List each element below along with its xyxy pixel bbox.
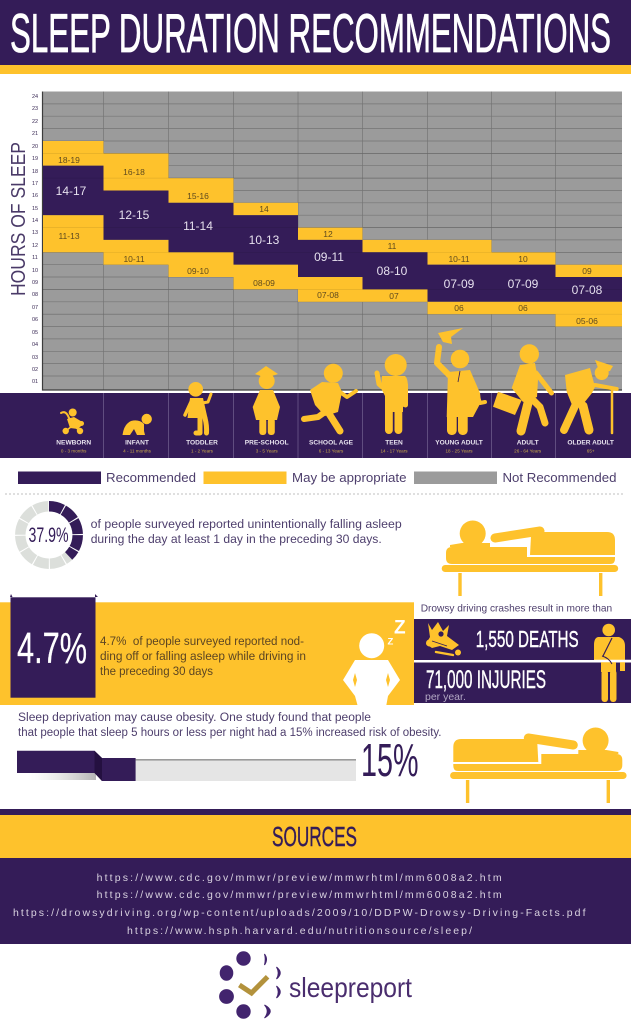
- panel: deaths and injuries: [414, 619, 631, 703]
- age group band: 14 - 17 Years: [380, 448, 408, 454]
- text: driving stat: [100, 634, 306, 678]
- sources list: https://www.hsph.harvard.edu/nutritionsource/sleep/: [127, 925, 472, 937]
- panel: deaths and injuries: per year.: [425, 691, 466, 703]
- column: toddler: [168, 178, 234, 277]
- sources list: https://www.cdc.gov/mmwr/preview/mmwrhtml/mm6008a2.htm: [97, 872, 502, 884]
- age group band: 18 - 25 Years: [445, 448, 473, 454]
- logo: sleepreport: sleepreport: [289, 972, 412, 1003]
- column: pre-school: 14: [259, 204, 269, 214]
- legend: Not Recommended: [502, 471, 617, 485]
- y axis ticks: 08: [32, 292, 38, 298]
- age group band: YOUNG ADULT: [435, 440, 483, 446]
- sources heading: SOURCES: [272, 821, 357, 852]
- column: young adult: 06: [454, 303, 464, 313]
- text: driving stat: ding off or falling asleep while driving in: [100, 649, 306, 663]
- y axis ticks: 17: [32, 181, 38, 187]
- column: teen: 08-10: [377, 264, 408, 278]
- column: young adult: [428, 240, 492, 314]
- age group band: 6 - 13 Years: [319, 448, 344, 454]
- column: newborn: 18-19: [58, 155, 80, 165]
- column: school age: [298, 228, 362, 302]
- age group band: [0, 393, 631, 458]
- icon: teen: [377, 354, 408, 434]
- icon: drowsy person: Z: [394, 618, 406, 638]
- big number: 15%: 15%: [361, 734, 418, 786]
- icon: car crash: [426, 622, 461, 656]
- age group band: 0 - 3 months: [61, 448, 87, 454]
- legend: May be appropriate: [292, 471, 407, 485]
- y axis ticks: 24: [32, 94, 38, 100]
- age group band: 65+: [587, 448, 595, 454]
- column: pre-school: [234, 203, 298, 289]
- column: adult: [492, 252, 556, 314]
- age group band: TODDLER: [186, 440, 218, 446]
- y axis ticks: 11: [32, 255, 38, 261]
- logo: sleepreport: [219, 951, 412, 1019]
- icon: toddler: [185, 382, 211, 433]
- age group band: NEWBORN: [56, 440, 91, 446]
- y axis ticks: 04: [32, 342, 38, 348]
- column: teen: [362, 240, 428, 302]
- age group band: 3 - 5 Years: [256, 448, 278, 454]
- column: newborn: [43, 141, 104, 252]
- text: daytime sleep stat: of people surveyed reported unintentionally falling asleep: [91, 517, 402, 531]
- icon: running child: [304, 364, 356, 431]
- legend: Recommended: [106, 471, 196, 485]
- panel: drowsy driving 4.7%: [0, 594, 414, 707]
- y axis ticks: 03: [32, 355, 38, 361]
- y axis ticks: 10: [32, 268, 38, 274]
- column: pre-school: 08-09: [253, 278, 275, 288]
- icon: person in bed: [442, 520, 618, 596]
- column: toddler: 15-16: [187, 191, 209, 201]
- text: driving stat: the preceding 30 days: [100, 664, 213, 678]
- progress bar: 15%: [17, 751, 356, 781]
- y axis ticks: 09: [32, 280, 38, 286]
- text: drowsy driving intro: Drowsy driving crashes result in more than: [421, 602, 612, 614]
- icon: drowsy person: Z: [388, 636, 394, 648]
- age group band: ADULT: [517, 440, 539, 446]
- column: newborn: 11-13: [58, 231, 80, 241]
- y axis ticks: 22: [32, 119, 38, 125]
- y axis ticks: 06: [32, 317, 38, 323]
- sources list: https://drowsydriving.org/wp-content/uploads/2009/10/DDPW-Drowsy-Driving-Facts.pdf: [13, 907, 586, 919]
- column: newborn: 14-17: [56, 184, 87, 198]
- icon: graduate: [437, 328, 485, 435]
- icon: drowsy person: [343, 618, 406, 707]
- icon: person in bed (mirrored): [450, 728, 627, 803]
- y axis title: HOURS OF SLEEP: [8, 142, 30, 296]
- icon: stroller: [61, 408, 84, 434]
- y axis ticks: 18: [32, 169, 38, 175]
- column: school age: 12: [323, 229, 333, 239]
- age group band: INFANT: [125, 440, 149, 446]
- y axis ticks: 12: [32, 243, 38, 249]
- text: driving stat: 4.7% of people surveyed reported nod-: [100, 634, 304, 648]
- text: daytime sleep stat: during the day at least 1 day in the preceding 30 days.: [91, 532, 382, 546]
- icon: pre-school child: [253, 366, 280, 435]
- icon: injured person: [594, 624, 631, 702]
- icon: older adult with cane: [564, 360, 617, 433]
- y axis ticks: 23: [32, 106, 38, 112]
- column: teen: 11: [388, 241, 397, 251]
- column: adult: 06: [518, 303, 528, 313]
- text: obesity stat: Sleep deprivation may cause obesity. One study found that people: [18, 712, 371, 724]
- column: older adult: [556, 265, 622, 326]
- column: adult: 10: [518, 254, 528, 264]
- column: adult: 07-09: [508, 277, 539, 291]
- donut: 37.9%: 37.9%: [28, 524, 68, 547]
- column: young adult: 10-11: [448, 254, 470, 264]
- text: obesity stat: [18, 712, 442, 739]
- y axis ticks: 07: [32, 305, 38, 311]
- y axis ticks: 13: [32, 230, 38, 236]
- y axis ticks: 02: [32, 367, 38, 373]
- y axis ticks: 20: [32, 144, 38, 150]
- age group band: OLDER ADULT: [567, 440, 614, 446]
- age group band: TEEN: [385, 440, 403, 446]
- column: infant: [104, 153, 168, 265]
- panel: deaths and injuries: 1,550 DEATHS: [476, 626, 579, 652]
- column: older adult: 09: [582, 266, 592, 276]
- column: infant: 16-18: [123, 167, 145, 177]
- age group band: 1 - 2 Years: [191, 448, 214, 454]
- y axis ticks: 19: [32, 156, 38, 162]
- age group band: PRE-SCHOOL: [245, 440, 289, 446]
- legend: [18, 471, 617, 485]
- chart: sleep hours by age: [42, 92, 622, 390]
- column: toddler: 09-10: [187, 266, 209, 276]
- sources heading: [0, 809, 631, 858]
- icon: infant: [122, 414, 152, 435]
- column: infant: 12-15: [119, 208, 150, 222]
- column: teen: 07: [389, 291, 399, 301]
- y axis ticks: 14: [32, 218, 38, 224]
- age group band: 26 - 64 Years: [514, 448, 542, 454]
- text: daytime sleep stat: [91, 517, 402, 546]
- column: school age: 09-11: [314, 250, 344, 264]
- column: young adult: 07-09: [444, 277, 475, 291]
- column: infant: 10-11: [123, 254, 145, 264]
- y axis ticks: 15: [32, 206, 38, 212]
- y axis ticks: 05: [32, 330, 38, 336]
- sources list: [0, 858, 631, 944]
- y axis ticks: 21: [32, 131, 38, 137]
- panel: drowsy driving 4.7%: 4.7%: [17, 624, 87, 673]
- text: obesity stat: that people that sleep 5 hours or less per night had a 15% increased risk of obesity.: [18, 727, 442, 739]
- y axis ticks: [32, 94, 38, 385]
- panel: deaths and injuries: 71,000 INJURIES: [426, 666, 546, 694]
- sources list: https://www.cdc.gov/mmwr/preview/mmwrhtml/mm6008a2.htm: [97, 889, 502, 901]
- donut: 37.9%: [20, 506, 78, 564]
- icon: adult with briefcase: [493, 344, 552, 431]
- column: school age: 07-08: [317, 290, 339, 300]
- age group band: SCHOOL AGE: [309, 440, 354, 446]
- age group band: 4 - 11 months: [123, 448, 152, 454]
- column: toddler: 11-14: [183, 219, 213, 233]
- column: older adult: 05-06: [576, 316, 598, 326]
- column: older adult: 07-08: [572, 283, 603, 297]
- column: pre-school: 10-13: [249, 233, 280, 247]
- y axis ticks: 01: [32, 379, 38, 385]
- y axis ticks: 16: [32, 193, 38, 199]
